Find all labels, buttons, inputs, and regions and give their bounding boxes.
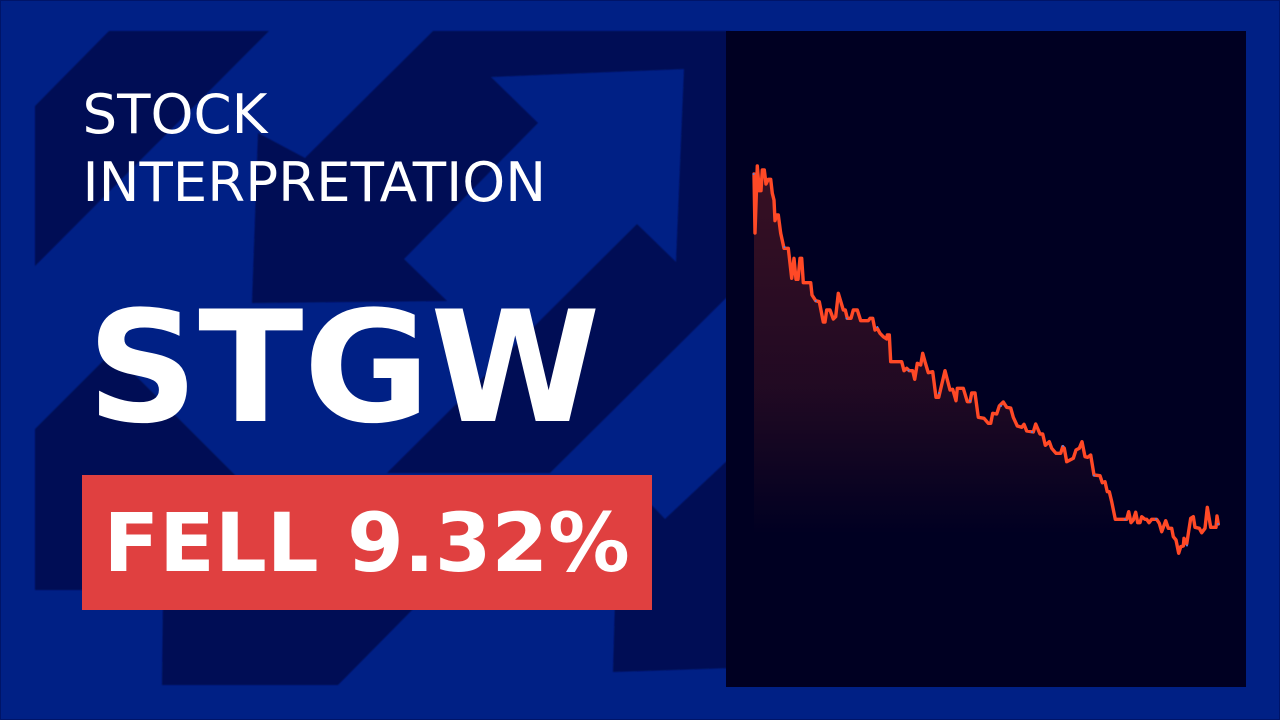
panel: price chart [726,31,1246,687]
title: stock interpretation: INTERPRETATION [82,150,546,214]
ticker symbol: STGW [87,279,600,458]
callout: percentage change: FELL 9.32% [104,496,630,591]
background arrows pattern [35,31,730,685]
chart area fill [754,166,1129,535]
data point markers [753,173,1219,546]
title: stock interpretation: STOCK [82,82,269,146]
title: stock interpretation [82,82,546,214]
callout: percentage change [82,475,652,610]
price line [754,166,1218,553]
